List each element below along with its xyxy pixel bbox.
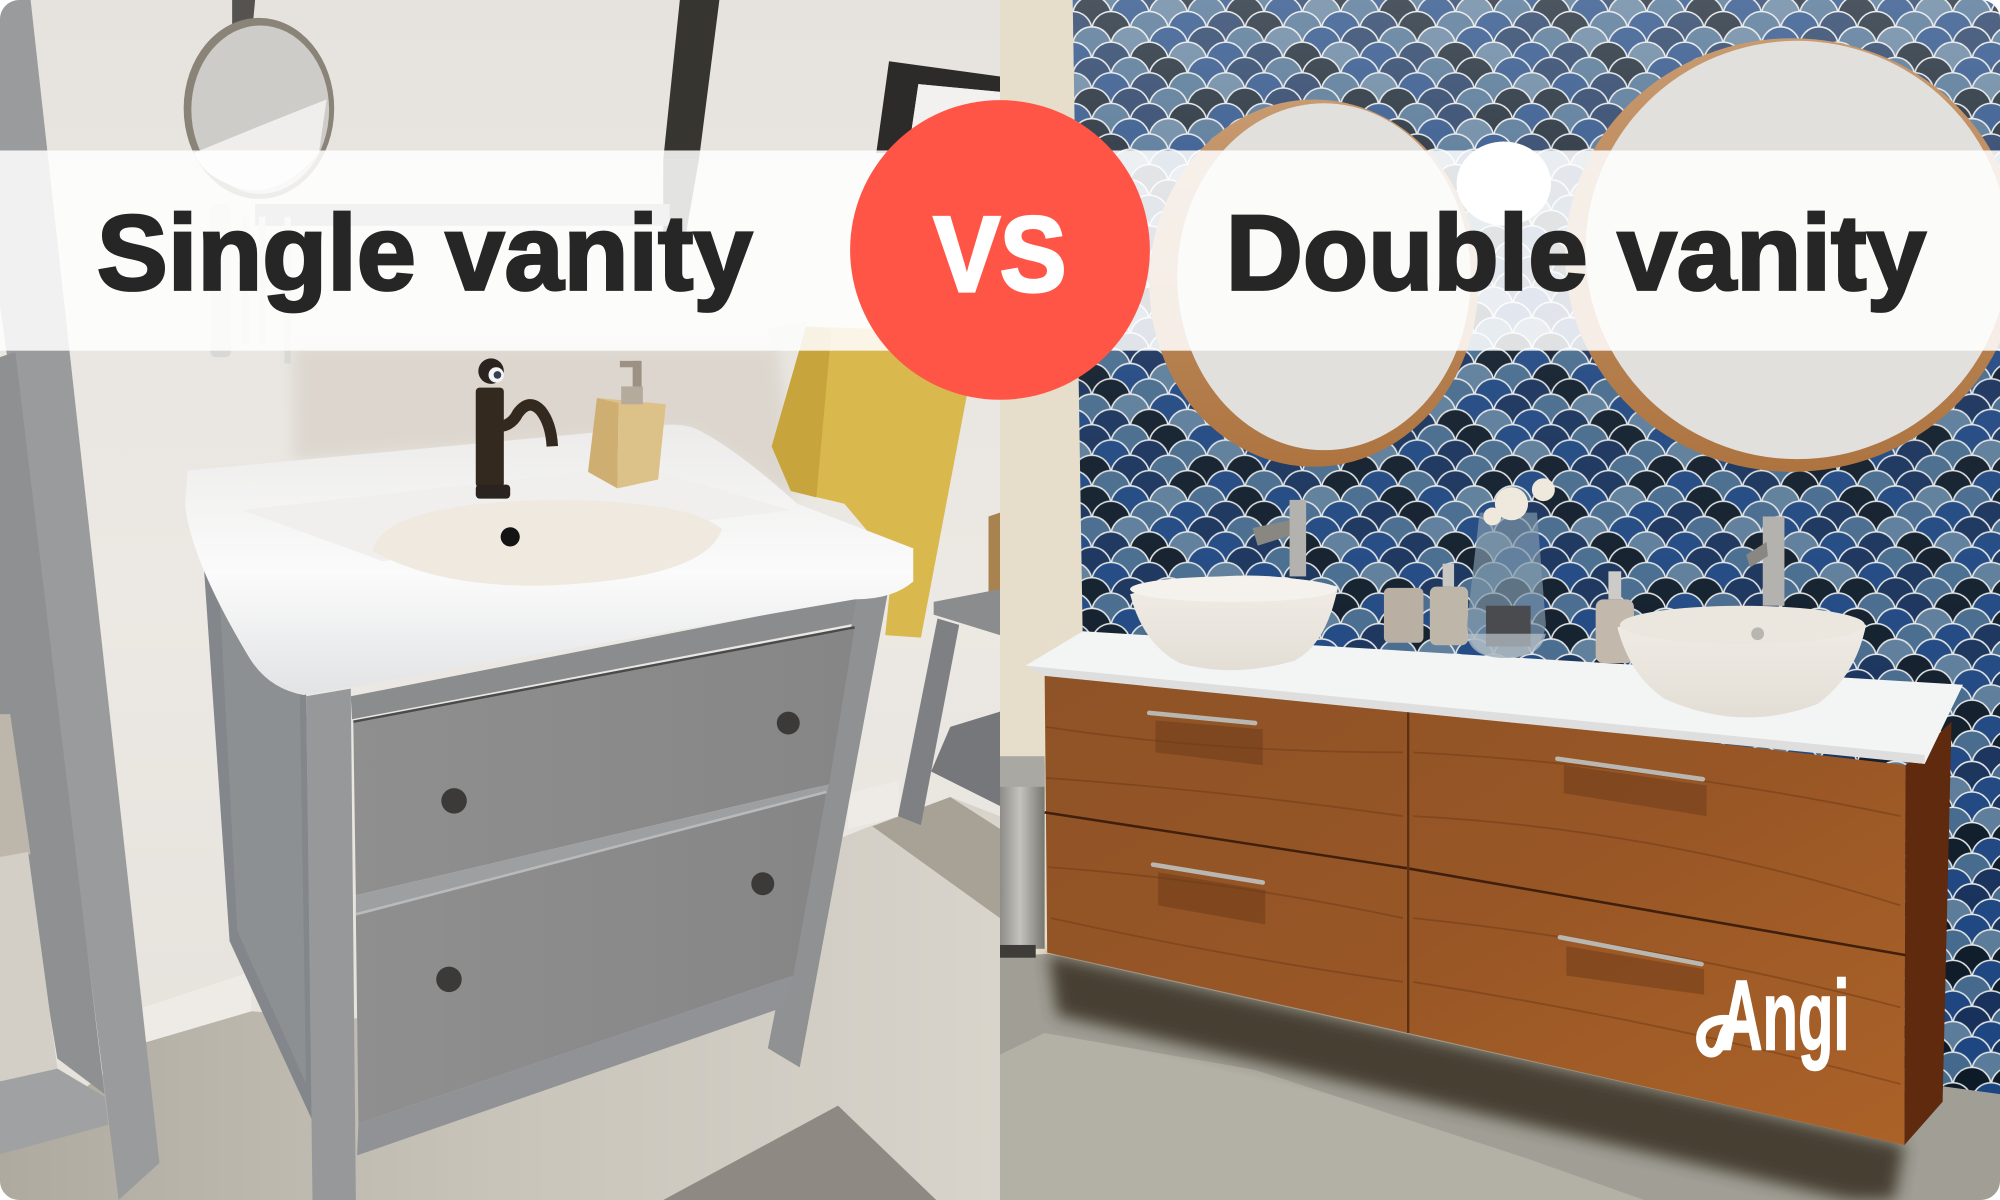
floor [0,797,1000,1200]
fish scale tile wall [1073,0,2000,1097]
cabinet [1045,675,1952,1145]
baseboard [143,972,251,1043]
faucet [476,358,552,499]
angi logo: Angi [1721,961,1849,1072]
globe wall light [1457,142,1551,226]
rug [663,1106,936,1200]
towel bar and towel [768,321,967,638]
trash can [1000,756,1045,958]
rug [1000,1033,1644,1200]
right faucet [1746,516,1784,606]
white countertop [1026,631,1963,764]
heading: single vanity: Single vanity [97,192,753,312]
right round mirror [1565,38,2000,472]
knobs [441,788,467,814]
handle shadows [1156,721,1707,995]
left basin [1130,576,1338,670]
floor [1000,954,2000,1200]
angi logo [1701,961,1849,1072]
vs badge: VS [934,194,1066,314]
handles [1149,713,1703,964]
drawer top [353,629,855,895]
drawer bottom [356,792,827,1123]
title banner [0,150,2000,351]
round wall mirror [184,18,334,363]
heading: double vanity: Double vanity [1226,192,1926,312]
small dark frame [876,61,1000,153]
floor shadow under cabinet [1048,954,1904,1200]
panel: single vanity photo [0,0,1000,1200]
vs badge [850,100,1150,400]
right basin [1617,606,1866,717]
left faucet [1253,500,1306,576]
accessories: cup, dispensers, vase and flowers [1384,478,1634,663]
soap dispenser [588,361,666,488]
left round mirror [1149,99,1478,467]
ceramic sink [185,425,913,695]
vanity cabinet [204,570,888,1200]
full length mirror frame [0,0,159,1200]
stool and basket [898,513,1000,825]
panel: double vanity photo [1000,0,2000,1200]
wall shading above sink [293,344,797,504]
large wall frame [232,0,719,232]
